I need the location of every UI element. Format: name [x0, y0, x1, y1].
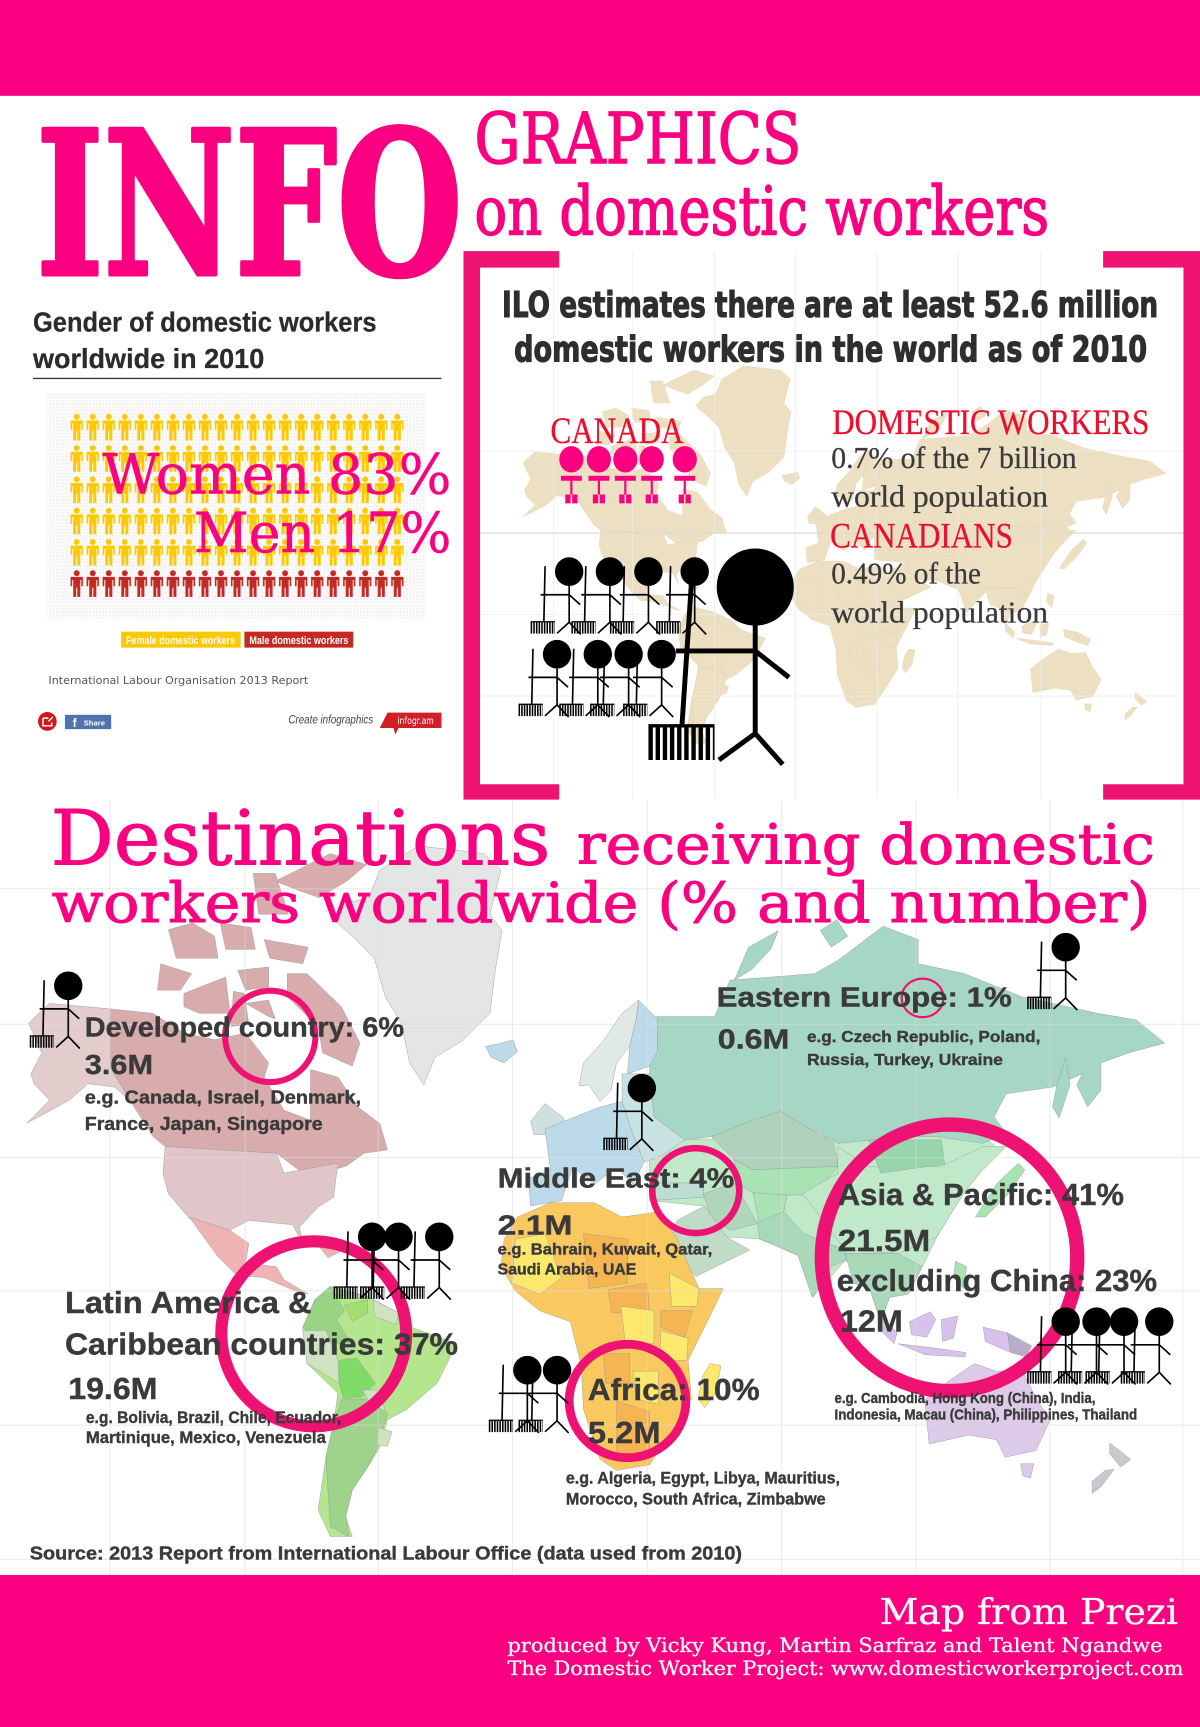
label: africa: 5.2M — [588, 1415, 661, 1450]
figures: developed — [30, 971, 82, 1049]
label: eastern europe — [717, 982, 1040, 1069]
label: africa: Morocco, South Africa, Zimbabwe — [566, 1491, 826, 1509]
text: Canadians share: 0.49% of the — [831, 557, 981, 591]
panel: destinations map — [0, 801, 1200, 1575]
legend: female — [121, 632, 241, 648]
label: middle east: Middle East: 4% — [498, 1162, 734, 1193]
title: INFO: INFO — [36, 88, 462, 322]
label: eastern europe: Eastern Europe: 1% — [717, 982, 1012, 1013]
legend: female: Female domestic workers — [126, 635, 235, 647]
figures: eastern europe — [1027, 933, 1080, 1010]
label: asia and pacific: Asia & Pacific: 41% — [838, 1177, 1124, 1212]
figures: latin america — [334, 1223, 453, 1300]
heading: destinations: receiving domestic — [577, 812, 1155, 877]
panel: gender of domestic workers — [32, 307, 451, 735]
label: middle east — [498, 1162, 734, 1278]
label: asia and pacific — [834, 1177, 1157, 1424]
text: Canadians share — [830, 515, 1048, 629]
dotted chart background — [47, 393, 426, 619]
overlay: men percent: Men 17% — [194, 501, 451, 565]
figures: middle east — [603, 1074, 656, 1151]
headline: ILO estimate — [502, 285, 1158, 370]
heading: gender — [32, 307, 377, 374]
text: Canadians share: CANADIANS — [830, 515, 1013, 555]
circle: africa — [569, 1344, 686, 1458]
label: asia and pacific: e.g. Cambodia, Hong Kong (China), India, — [834, 1391, 1095, 1407]
footer band — [0, 1575, 1200, 1727]
label: developed country: France, Japan, Singapore — [85, 1113, 323, 1134]
label: developed country: Developed country: 6% — [85, 1011, 404, 1042]
icons: five women — [559, 446, 697, 503]
overlay: women percent: Women 83% — [102, 442, 451, 506]
circle: middle east — [652, 1148, 739, 1233]
label: middle east: e.g. Bahrain, Kuwait, Qatar, — [498, 1241, 712, 1258]
colored world map — [26, 846, 1165, 1536]
label: asia and pacific: Indonesia, Macau (China), Philippines, Thailand — [834, 1408, 1137, 1424]
circle: eastern europe — [902, 979, 943, 1017]
label: developed country: e.g. Canada, Israel, Denmark, — [85, 1087, 361, 1108]
heading: destinations: Destinations — [51, 794, 550, 883]
icon: share — [38, 712, 57, 731]
footer: project website: The Domestic Worker Project: www.domesticworkerproject.com — [508, 1657, 1184, 1680]
text: domestic workers share: world population — [831, 480, 1048, 514]
text: domestic workers share — [831, 402, 1149, 514]
heading: gender: worldwide in 2010 — [32, 343, 264, 374]
button: facebook share: Share — [84, 718, 106, 727]
label: middle east: 2.1M — [498, 1210, 572, 1241]
figures: asia pacific — [1027, 1307, 1173, 1384]
top pink band — [0, 0, 1200, 96]
button: facebook share — [65, 715, 111, 730]
pink bracket left — [463, 251, 559, 800]
footer: map credit: Map from Prezi — [880, 1592, 1178, 1633]
pink bracket right — [1103, 251, 1200, 800]
heading: destinations: workers worldwide (% and number) — [52, 871, 1150, 935]
text: domestic workers share: DOMESTIC WORKERS — [832, 402, 1149, 442]
circle: developed countries — [225, 991, 315, 1082]
label: latin america: Caribbean countries: 37% — [65, 1327, 458, 1362]
badge: infogr.am — [380, 713, 441, 735]
text: Canadians share: world population — [831, 595, 1048, 629]
label: africa: Africa: 10% — [588, 1372, 760, 1407]
circle: asia and pacific — [822, 1125, 1077, 1391]
title: GRAPHICS: GRAPHICS — [474, 98, 801, 180]
legend: male — [244, 632, 353, 648]
panel: world total map with bracket — [463, 251, 1200, 800]
label: developed country — [85, 1011, 404, 1134]
icons: small stick figure workers — [519, 557, 709, 717]
legend: male: Male domestic workers — [249, 635, 348, 647]
text: create infographics: Create infographics — [288, 715, 373, 727]
label: latin america: Martinique, Mexico, Venezuela — [86, 1429, 327, 1447]
label: latin america — [65, 1285, 458, 1447]
figures: africa — [489, 1356, 571, 1433]
source: ILO report: International Labour Organisation 2013 Report — [48, 674, 309, 687]
label: developed country: 3.6M — [85, 1049, 153, 1080]
label: africa — [566, 1372, 840, 1509]
footer: producers: produced by Vicky Kung, Martin Sarfraz and Talent Ngandwe — [508, 1634, 1163, 1657]
label: asia and pacific: 21.5M — [838, 1223, 930, 1258]
button: facebook share: f — [73, 716, 78, 730]
label: africa: e.g. Algeria, Egypt, Libya, Mauritius, — [566, 1470, 840, 1488]
label: eastern europe: 0.6M — [718, 1024, 789, 1055]
label: latin america: Latin America & — [65, 1285, 312, 1320]
icon: large stick figure with broom — [648, 548, 794, 764]
label: CANADA: CANADA — [550, 411, 684, 452]
label: latin america: 19.6M — [68, 1371, 157, 1406]
heading: gender: Gender of domestic workers — [33, 307, 377, 338]
label: middle east: Saudi Arabia, UAE — [498, 1261, 636, 1278]
text: domestic workers share: 0.7% of the 7 billion — [831, 441, 1077, 475]
label: asia and pacific: excluding China: 23% — [837, 1263, 1157, 1298]
beige world map — [522, 366, 1166, 744]
badge: infogr.am: infogr.am — [397, 716, 434, 727]
pictogram: men workers — [69, 568, 405, 599]
pictogram: women workers — [69, 412, 405, 568]
label: eastern europe: e.g. Czech Republic, Poland, — [807, 1029, 1040, 1046]
circle: latin america — [221, 1241, 406, 1426]
title: on domestic workers: on domestic workers — [474, 173, 1049, 251]
label: eastern europe: Russia, Turkey, Ukraine — [807, 1052, 1003, 1069]
heading: destinations — [51, 794, 1155, 935]
source note: Source: 2013 Report from International Labour Office (data used from 2010) — [30, 1543, 742, 1564]
label: latin america: e.g. Bolivia, Brazil, Chile, Ecuador, — [86, 1409, 341, 1427]
label: asia and pacific: 12M — [840, 1304, 903, 1339]
